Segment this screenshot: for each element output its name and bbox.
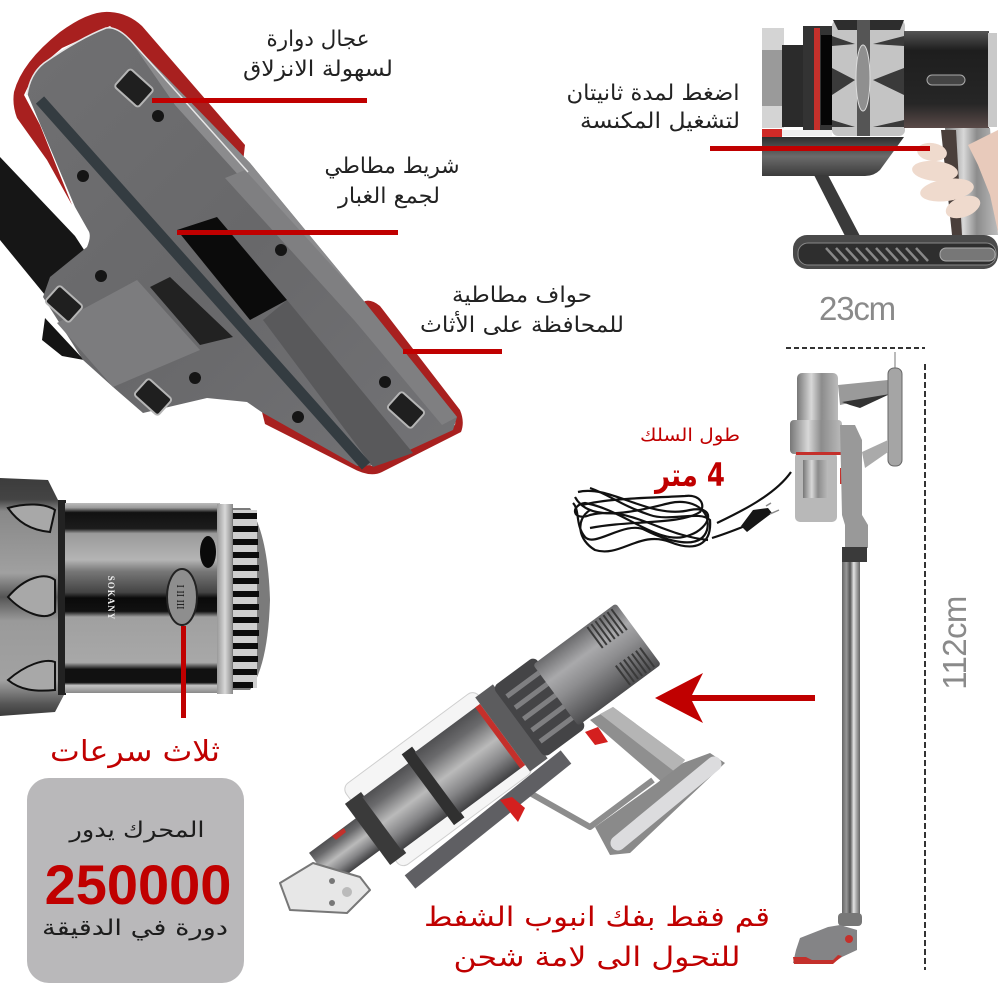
photo: full stick vacuum	[790, 352, 902, 964]
motor barrel	[65, 503, 220, 693]
dashed width line	[786, 347, 925, 349]
text: convert to handheld	[424, 902, 770, 973]
callout lines for the brush	[152, 98, 502, 354]
cyclone	[832, 20, 905, 136]
neck	[309, 816, 383, 885]
text: rubber strip: شريط مطاطي	[324, 154, 460, 179]
dark ring	[402, 747, 464, 825]
motor vents	[587, 609, 654, 685]
text: rubber edges: للمحافظة على الأثاث	[420, 311, 624, 338]
callout line for the trigger	[710, 146, 930, 151]
icon: power cable and plug	[573, 472, 791, 551]
photo: handheld vacuum	[280, 591, 725, 913]
text: convert to handheld: للتحول الى لامة شحن	[454, 942, 740, 973]
photo: floor brush underside	[0, 12, 463, 474]
photo: motor close-up	[0, 478, 270, 716]
suction opening	[177, 217, 287, 320]
panel: motor speed	[27, 778, 244, 983]
text: three speeds: ثلاث سرعات	[50, 734, 220, 768]
screws	[77, 110, 391, 423]
text: swivel wheels	[243, 27, 393, 82]
red clips	[500, 797, 525, 822]
base collar	[345, 792, 406, 865]
red rubber edge lower right	[262, 301, 463, 474]
red rubber edge top	[13, 12, 245, 205]
collar	[803, 26, 833, 131]
rubber dust strip	[40, 100, 366, 466]
vent slot	[200, 536, 216, 568]
white nozzle	[280, 863, 370, 913]
silver ring	[217, 504, 233, 694]
cyclone shoulder	[0, 478, 65, 716]
wand connector	[840, 425, 868, 548]
text: swivel wheels: لسهولة الانزلاق	[243, 57, 393, 82]
text: press to operate	[566, 81, 740, 134]
chrome handle	[945, 128, 998, 235]
base battery	[793, 235, 998, 269]
text: rubber edges	[420, 283, 624, 338]
floor head	[793, 925, 857, 963]
text: convert to handheld: قم فقط بفك انبوب الشفط	[424, 902, 770, 933]
gray lower panel	[57, 280, 200, 387]
red ring	[796, 452, 844, 455]
brush body	[27, 28, 457, 466]
photo: motor close-up: I II III	[174, 585, 185, 609]
text: cable length label: طول السلك	[640, 425, 740, 446]
black swivel joint	[42, 318, 84, 360]
callout line for speed switch	[181, 626, 186, 718]
wand	[842, 562, 860, 914]
text: rubber strip	[324, 154, 460, 209]
brand: SOKANY	[106, 576, 116, 620]
clear bin	[795, 452, 837, 522]
vent fins	[232, 508, 270, 690]
air channel	[150, 277, 233, 345]
handle strut	[814, 175, 860, 236]
hand	[911, 130, 998, 232]
wand joint	[838, 913, 862, 926]
rod	[530, 780, 653, 827]
upper cylinder	[415, 706, 523, 813]
label: width 23cm: 23cm	[819, 290, 895, 327]
cylinders rotated along axis	[289, 591, 667, 907]
text: press to operate: اضغط لمدة ثانيتان	[566, 81, 740, 106]
motor barrel	[533, 603, 661, 726]
red ring	[475, 704, 525, 769]
label: height 112cm: 112cm	[936, 596, 973, 690]
cyclone	[492, 656, 587, 758]
text: rubber edges: حواف مطاطية	[452, 283, 592, 308]
dark collar	[475, 684, 548, 771]
arrow: pointing to handheld	[655, 673, 815, 723]
text: press to operate: لتشغيل المكنسة	[580, 109, 740, 134]
plug	[741, 508, 772, 532]
dashed height line	[924, 364, 926, 970]
black motor housing	[904, 31, 989, 128]
red release clip	[762, 129, 782, 143]
panel line two: دورة في الدقيقة	[42, 916, 228, 941]
tube	[410, 757, 566, 882]
battery base	[595, 753, 725, 855]
text: rubber strip: لجمع الغبار	[337, 184, 440, 209]
handle	[590, 707, 685, 783]
lighter right strip	[130, 40, 363, 300]
wedge	[762, 137, 904, 176]
motor cylinder	[797, 373, 838, 425]
handle	[838, 380, 892, 405]
battery light bar	[618, 764, 714, 843]
left tube	[762, 28, 784, 128]
antenna	[894, 352, 896, 368]
photo: handle close-up with hand	[762, 20, 998, 269]
neck red mark	[332, 828, 346, 840]
right inner panel	[263, 300, 413, 467]
panel line one: المحرك يدور	[68, 818, 204, 843]
clear bin	[342, 689, 534, 869]
swivel wheels	[45, 68, 425, 429]
text: swivel wheels: عجال دوارة	[266, 27, 370, 52]
black wand tube	[0, 157, 92, 295]
text: cable length value: 4 متر	[653, 456, 725, 494]
panel background	[27, 778, 244, 983]
white trim line	[27, 28, 248, 172]
speed switch	[167, 569, 197, 625]
lower cylinder	[362, 761, 450, 850]
panel number: 250000	[45, 853, 231, 916]
